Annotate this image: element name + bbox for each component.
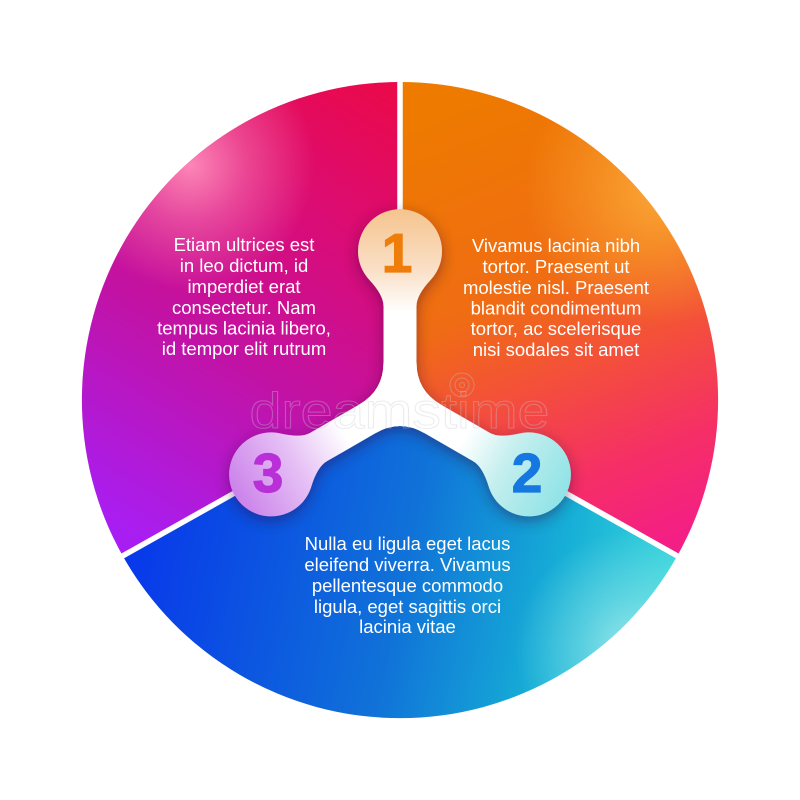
text block: segment 1: tortor. Praesent ut (482, 256, 630, 277)
panel: segment 2 blue (123, 400, 677, 718)
number 2: 2 (512, 442, 542, 504)
text block: segment 2: ligula, eget sagittis orci (314, 596, 501, 617)
text block: segment 2: pellentesque commodo (312, 575, 503, 596)
text block: segment 1: nisi sodales sit amet (473, 339, 639, 360)
text block: segment 2: Nulla eu ligula eget lacus (305, 533, 510, 554)
number 3: 3 (253, 442, 283, 504)
connector: three-armed hub with number bubbles (214, 209, 586, 532)
text block: segment 1: tortor, ac scelerisque (471, 318, 641, 339)
text block: segment 3: consectetur. Nam (172, 297, 316, 318)
number 1: 1 (382, 222, 412, 284)
text block: segment 3: Etiam ultrices est (174, 234, 314, 255)
text block: segment 2: eleifend viverra. Vivamus (304, 554, 511, 575)
text block: segment 3: id tempor elit rutrum (162, 338, 326, 359)
panel: segment 1 orange (400, 82, 718, 556)
text block: segment 1: Vivamus lacinia nibh (472, 235, 640, 256)
text block: segment 1: molestie nisl. Praesent (463, 277, 649, 298)
panel: segment 3 magenta (82, 82, 400, 556)
text block: segment 3: imperdiet erat (187, 276, 301, 297)
watermark: dreamstime (250, 383, 550, 439)
text block: segment 1: blandit condimentum (471, 298, 641, 318)
text block: segment 2: lacinia vitae (359, 616, 456, 637)
text block: segment 3: in leo dictum, id (180, 255, 308, 276)
text block: segment 3: tempus lacinia libero, (157, 318, 331, 338)
